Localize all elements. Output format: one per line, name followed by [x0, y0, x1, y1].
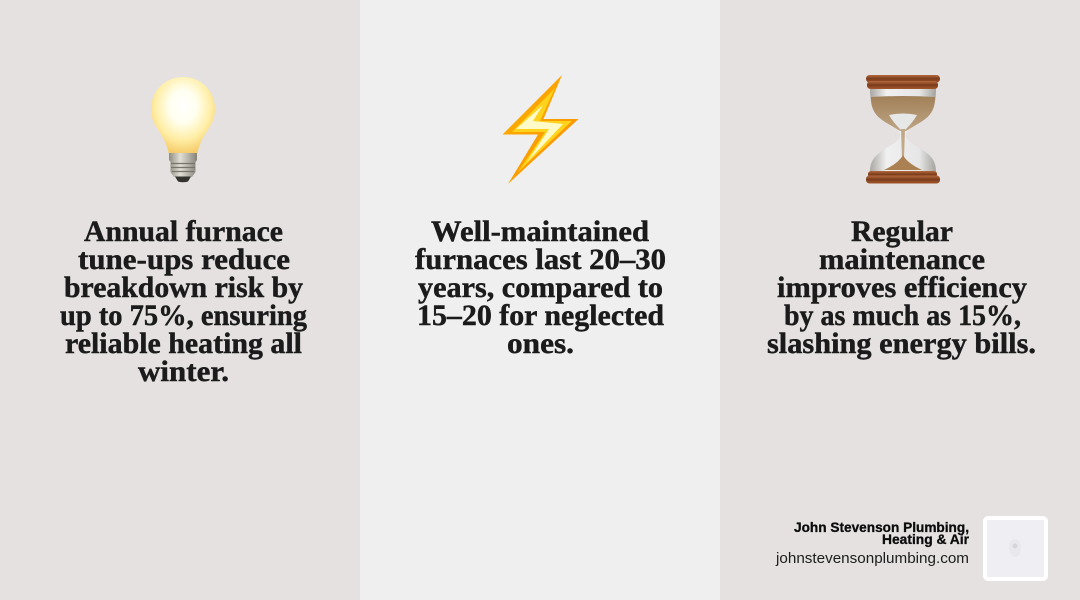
footer: company name and website: [775, 520, 970, 567]
heading: middle panel statement: 15–20 for neglected: [417, 299, 664, 332]
footer: company name and website: John Stevenson Plumbing,: [794, 520, 969, 535]
panel: right background: [720, 0, 1080, 600]
heading: middle panel statement: Well-maintained: [431, 215, 649, 248]
icon: lightning bolt: [502, 75, 578, 184]
heading: left panel statement: winter.: [138, 355, 229, 388]
heading: left panel statement: reliable heating all: [65, 327, 302, 360]
panel: left background: [0, 0, 360, 600]
icon: light bulb: [151, 77, 215, 182]
footer: company name and website: Heating & Air: [882, 532, 970, 547]
heading: left panel statement: breakdown risk by: [64, 271, 303, 304]
panel: middle background: [360, 0, 720, 600]
heading: left panel statement: Annual furnace: [84, 215, 283, 248]
icon: hourglass: [866, 75, 940, 184]
heading: left panel statement: [60, 215, 307, 388]
heading: middle panel statement: ones.: [507, 327, 574, 360]
footer: company name and website: johnstevensonplumbing.com: [775, 551, 969, 567]
heading: right panel statement: by as much as 15%,: [784, 299, 1021, 332]
heading: right panel statement: improves efficiency: [777, 271, 1027, 304]
heading: left panel statement: tune-ups reduce: [78, 243, 290, 276]
heading: left panel statement: up to 75%, ensuring: [60, 299, 307, 332]
heading: right panel statement: slashing energy bills.: [767, 327, 1036, 360]
heading: middle panel statement: years, compared to: [418, 271, 663, 304]
heading: right panel statement: maintenance: [819, 243, 985, 276]
heading: middle panel statement: furnaces last 20–30: [415, 243, 666, 276]
heading: right panel statement: Regular: [851, 215, 953, 248]
logo placeholder: [985, 518, 1046, 579]
heading: middle panel statement: [415, 215, 666, 360]
heading: right panel statement: [767, 215, 1036, 360]
